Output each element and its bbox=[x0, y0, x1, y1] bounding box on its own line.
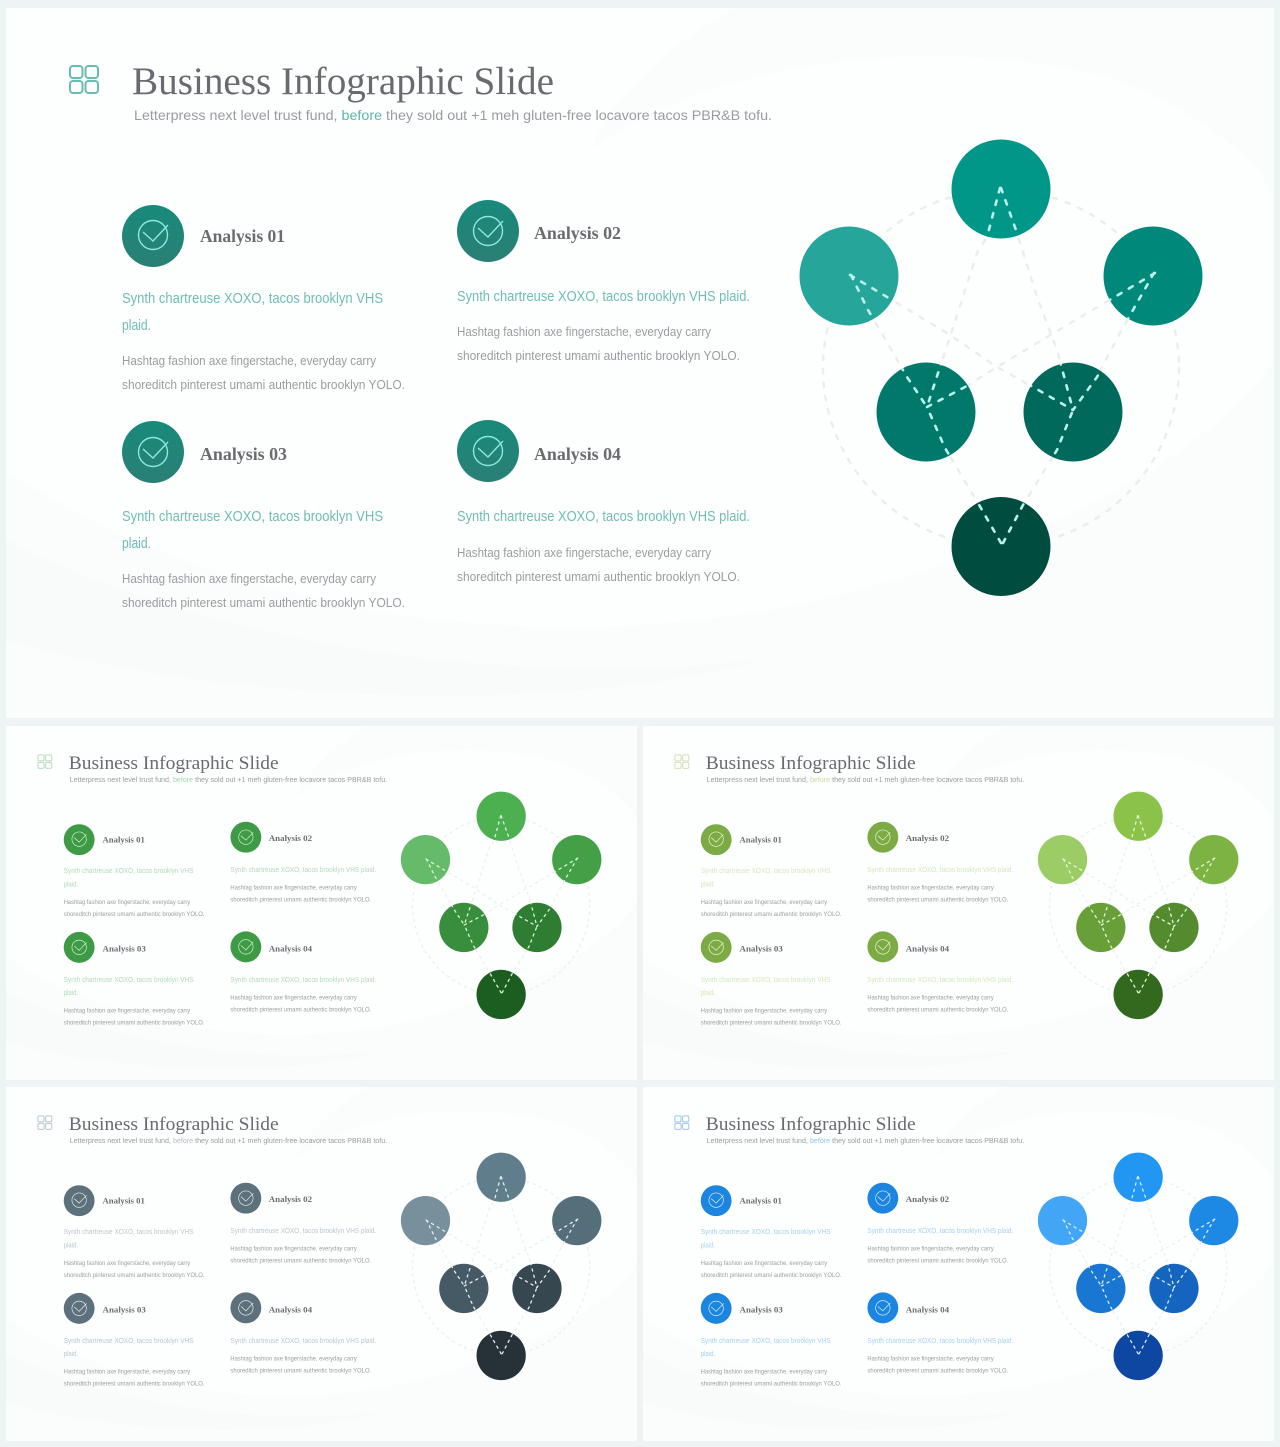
item: analysis 04: shoreditch pinterest umami authentic brooklyn YOLO. bbox=[457, 570, 740, 584]
item: analysis 02 bbox=[867, 822, 1013, 904]
icon: grid bbox=[675, 1116, 689, 1129]
item: analysis 03: Hashtag fashion axe fingerstache, everyday carry bbox=[701, 1008, 828, 1015]
item: analysis 02: Analysis 02 bbox=[906, 833, 949, 843]
item: analysis 03: shoreditch pinterest umami authentic brooklyn YOLO. bbox=[701, 1381, 842, 1388]
item: analysis 03: Analysis 03 bbox=[103, 943, 146, 953]
item: analysis 02: Hashtag fashion axe fingerstache, everyday carry bbox=[230, 1246, 358, 1253]
item: analysis 01: plaid. bbox=[701, 1241, 715, 1250]
title: Business Infographic Slide bbox=[706, 1114, 916, 1135]
item: analysis 01: shoreditch pinterest umami authentic brooklyn YOLO. bbox=[701, 911, 842, 918]
icon: grid bbox=[38, 755, 52, 768]
item: analysis 03: plaid. bbox=[122, 536, 151, 552]
item: analysis 03: Analysis 03 bbox=[103, 1304, 146, 1314]
item: analysis 01: shoreditch pinterest umami authentic brooklyn YOLO. bbox=[64, 1272, 205, 1279]
subtitle: Letterpress next level trust fund, before they sold out +1 meh gluten-free locavore tacos PBR&B tofu. bbox=[707, 777, 1024, 784]
item: analysis 03: Hashtag fashion axe fingerstache, everyday carry bbox=[701, 1369, 828, 1376]
item: analysis 04: Hashtag fashion axe fingerstache, everyday carry bbox=[867, 995, 995, 1002]
title: Business Infographic Slide bbox=[706, 753, 916, 774]
item: analysis 04: shoreditch pinterest umami authentic brooklyn YOLO. bbox=[230, 1007, 372, 1014]
item: analysis 01: shoreditch pinterest umami authentic brooklyn YOLO. bbox=[64, 911, 205, 918]
item: analysis 02: Analysis 02 bbox=[269, 833, 312, 843]
item: analysis 01: Synth chartreuse XOXO, tacos brooklyn VHS bbox=[64, 1227, 194, 1236]
item: analysis 04: Synth chartreuse XOXO, tacos brooklyn VHS plaid. bbox=[867, 1336, 1013, 1345]
item: analysis 04 bbox=[867, 931, 1013, 1014]
item: analysis 04 bbox=[230, 931, 376, 1014]
item: analysis 02: Hashtag fashion axe fingerstache, everyday carry bbox=[230, 885, 358, 892]
item: analysis 03: plaid. bbox=[64, 1349, 78, 1358]
item: analysis 01: Synth chartreuse XOXO, tacos brooklyn VHS bbox=[64, 866, 194, 875]
item: analysis 03: Hashtag fashion axe fingerstache, everyday carry bbox=[64, 1008, 191, 1015]
item: analysis 04: Synth chartreuse XOXO, tacos brooklyn VHS plaid. bbox=[230, 1336, 376, 1345]
item: analysis 01 bbox=[64, 824, 205, 918]
item: analysis 01: Synth chartreuse XOXO, tacos brooklyn VHS bbox=[122, 291, 383, 307]
item: analysis 04: Analysis 04 bbox=[906, 1304, 950, 1314]
item: analysis 01: plaid. bbox=[64, 880, 78, 889]
panel: blue slide bbox=[643, 1087, 1274, 1441]
item: analysis 04: Hashtag fashion axe fingerstache, everyday carry bbox=[457, 546, 712, 560]
item: analysis 02: Hashtag fashion axe fingerstache, everyday carry bbox=[867, 885, 995, 892]
item: analysis 01: Hashtag fashion axe fingerstache, everyday carry bbox=[701, 899, 828, 906]
icon: grid bbox=[675, 755, 689, 768]
item: analysis 02: Analysis 02 bbox=[534, 223, 621, 243]
item: analysis 02 bbox=[867, 1183, 1013, 1265]
item: analysis 03 bbox=[122, 421, 405, 610]
subtitle: Letterpress next level trust fund, before they sold out +1 meh gluten-free locavore tacos PBR&B tofu. bbox=[707, 1138, 1024, 1145]
item: analysis 03 bbox=[701, 932, 842, 1027]
item: analysis 02: Synth chartreuse XOXO, tacos brooklyn VHS plaid. bbox=[867, 1226, 1013, 1235]
item: analysis 03: Analysis 03 bbox=[740, 943, 783, 953]
item: analysis 04: Analysis 04 bbox=[534, 444, 621, 464]
item: analysis 04: shoreditch pinterest umami authentic brooklyn YOLO. bbox=[867, 1007, 1009, 1014]
title: Business Infographic Slide bbox=[69, 753, 279, 774]
subtitle: Letterpress next level trust fund, before they sold out +1 meh gluten-free locavore tacos PBR&B tofu. bbox=[70, 777, 387, 784]
item: analysis 03 bbox=[701, 1293, 842, 1388]
diagram: connected circles bbox=[401, 1153, 601, 1380]
item: analysis 03: Synth chartreuse XOXO, tacos brooklyn VHS bbox=[64, 1336, 194, 1345]
item: analysis 02: Synth chartreuse XOXO, tacos brooklyn VHS plaid. bbox=[230, 865, 376, 874]
item: analysis 04: Synth chartreuse XOXO, tacos brooklyn VHS plaid. bbox=[867, 975, 1013, 984]
item: analysis 01: Synth chartreuse XOXO, tacos brooklyn VHS bbox=[701, 1227, 831, 1236]
item: analysis 03: shoreditch pinterest umami authentic brooklyn YOLO. bbox=[64, 1020, 205, 1027]
item: analysis 03: plaid. bbox=[64, 988, 78, 997]
item: analysis 02: shoreditch pinterest umami authentic brooklyn YOLO. bbox=[867, 896, 1009, 904]
item: analysis 04: Analysis 04 bbox=[269, 943, 313, 953]
panel: light green slide bbox=[643, 726, 1274, 1080]
item: analysis 04: Synth chartreuse XOXO, tacos brooklyn VHS plaid. bbox=[230, 975, 376, 984]
item: analysis 02: shoreditch pinterest umami authentic brooklyn YOLO. bbox=[867, 1257, 1009, 1265]
item: analysis 01 bbox=[64, 1185, 205, 1279]
item: analysis 01: plaid. bbox=[701, 880, 715, 889]
icon: grid bbox=[70, 66, 98, 93]
item: analysis 01: Synth chartreuse XOXO, tacos brooklyn VHS bbox=[701, 866, 831, 875]
item: analysis 01 bbox=[701, 1185, 842, 1279]
item: analysis 03: Analysis 03 bbox=[200, 444, 287, 464]
item: analysis 04: Hashtag fashion axe fingerstache, everyday carry bbox=[230, 995, 358, 1002]
item: analysis 03: Hashtag fashion axe fingerstache, everyday carry bbox=[64, 1369, 191, 1376]
item: analysis 03: shoreditch pinterest umami authentic brooklyn YOLO. bbox=[64, 1381, 205, 1388]
item: analysis 02: shoreditch pinterest umami authentic brooklyn YOLO. bbox=[457, 349, 740, 363]
item: analysis 02: Hashtag fashion axe fingerstache, everyday carry bbox=[457, 325, 712, 339]
item: analysis 03: shoreditch pinterest umami authentic brooklyn YOLO. bbox=[701, 1020, 842, 1027]
item: analysis 02: Analysis 02 bbox=[269, 1194, 312, 1204]
item: analysis 03: Synth chartreuse XOXO, tacos brooklyn VHS bbox=[701, 975, 831, 984]
item: analysis 01: shoreditch pinterest umami authentic brooklyn YOLO. bbox=[701, 1272, 842, 1279]
item: analysis 03 bbox=[64, 932, 205, 1027]
item: analysis 04: Hashtag fashion axe fingerstache, everyday carry bbox=[867, 1356, 995, 1363]
item: analysis 02: Analysis 02 bbox=[906, 1194, 949, 1204]
diagram: connected circles bbox=[401, 792, 601, 1019]
item: analysis 03: Synth chartreuse XOXO, tacos brooklyn VHS bbox=[122, 509, 383, 525]
item: analysis 02: Hashtag fashion axe fingerstache, everyday carry bbox=[867, 1246, 995, 1253]
item: analysis 04 bbox=[457, 420, 750, 584]
item: analysis 04: shoreditch pinterest umami authentic brooklyn YOLO. bbox=[230, 1368, 372, 1375]
item: analysis 01: plaid. bbox=[122, 318, 151, 334]
item: analysis 01: Analysis 01 bbox=[103, 1196, 145, 1206]
item: analysis 01: plaid. bbox=[64, 1241, 78, 1250]
item: analysis 01: Hashtag fashion axe fingerstache, everyday carry bbox=[64, 1260, 191, 1267]
panel: green slide bbox=[6, 726, 637, 1080]
item: analysis 01: Analysis 01 bbox=[740, 835, 782, 845]
title: Business Infographic Slide bbox=[132, 60, 554, 103]
item: analysis 04: shoreditch pinterest umami authentic brooklyn YOLO. bbox=[867, 1368, 1009, 1375]
item: analysis 04: Analysis 04 bbox=[269, 1304, 313, 1314]
item: analysis 04: Hashtag fashion axe fingerstache, everyday carry bbox=[230, 1356, 358, 1363]
item: analysis 02 bbox=[457, 200, 750, 363]
item: analysis 03 bbox=[64, 1293, 205, 1388]
item: analysis 03: plaid. bbox=[701, 1349, 715, 1358]
diagram: connected circles bbox=[1038, 792, 1238, 1019]
item: analysis 02 bbox=[230, 822, 376, 904]
item: analysis 03: Hashtag fashion axe fingerstache, everyday carry bbox=[122, 572, 377, 586]
item: analysis 04: Analysis 04 bbox=[906, 943, 950, 953]
item: analysis 01: Hashtag fashion axe fingerstache, everyday carry bbox=[122, 354, 377, 368]
diagram: connected circles bbox=[1038, 1153, 1238, 1380]
panel: blue grey slide bbox=[6, 1087, 637, 1441]
item: analysis 01 bbox=[122, 205, 405, 392]
item: analysis 03: Synth chartreuse XOXO, tacos brooklyn VHS bbox=[64, 975, 194, 984]
item: analysis 02: Synth chartreuse XOXO, tacos brooklyn VHS plaid. bbox=[230, 1226, 376, 1235]
item: analysis 04 bbox=[867, 1292, 1013, 1375]
item: analysis 02: Synth chartreuse XOXO, tacos brooklyn VHS plaid. bbox=[457, 289, 750, 305]
subtitle: Letterpress next level trust fund, before they sold out +1 meh gluten-free locavore tacos PBR&B tofu. bbox=[70, 1138, 387, 1145]
icon: grid bbox=[38, 1116, 52, 1129]
item: analysis 02: shoreditch pinterest umami authentic brooklyn YOLO. bbox=[230, 896, 372, 904]
item: analysis 02: shoreditch pinterest umami authentic brooklyn YOLO. bbox=[230, 1257, 372, 1265]
item: analysis 01: Hashtag fashion axe fingerstache, everyday carry bbox=[701, 1260, 828, 1267]
item: analysis 03: Analysis 03 bbox=[740, 1304, 783, 1314]
item: analysis 01: shoreditch pinterest umami authentic brooklyn YOLO. bbox=[122, 378, 405, 392]
item: analysis 03: shoreditch pinterest umami authentic brooklyn YOLO. bbox=[122, 596, 405, 610]
item: analysis 01 bbox=[701, 824, 842, 918]
item: analysis 01: Analysis 01 bbox=[103, 835, 145, 845]
item: analysis 03: plaid. bbox=[701, 988, 715, 997]
diagram: connected circles bbox=[800, 140, 1202, 596]
item: analysis 04 bbox=[230, 1292, 376, 1375]
item: analysis 02: Synth chartreuse XOXO, tacos brooklyn VHS plaid. bbox=[867, 865, 1013, 874]
item: analysis 01: Hashtag fashion axe fingerstache, everyday carry bbox=[64, 899, 191, 906]
item: analysis 01: Analysis 01 bbox=[200, 226, 285, 246]
item: analysis 01: Analysis 01 bbox=[740, 1196, 782, 1206]
item: analysis 02 bbox=[230, 1183, 376, 1265]
item: analysis 03: Synth chartreuse XOXO, tacos brooklyn VHS bbox=[701, 1336, 831, 1345]
subtitle: Letterpress next level trust fund, before they sold out +1 meh gluten-free locavore tacos PBR&B tofu. bbox=[134, 107, 772, 123]
panel: main teal slide bbox=[6, 8, 1274, 718]
title: Business Infographic Slide bbox=[69, 1114, 279, 1135]
item: analysis 04: Synth chartreuse XOXO, tacos brooklyn VHS plaid. bbox=[457, 509, 750, 525]
